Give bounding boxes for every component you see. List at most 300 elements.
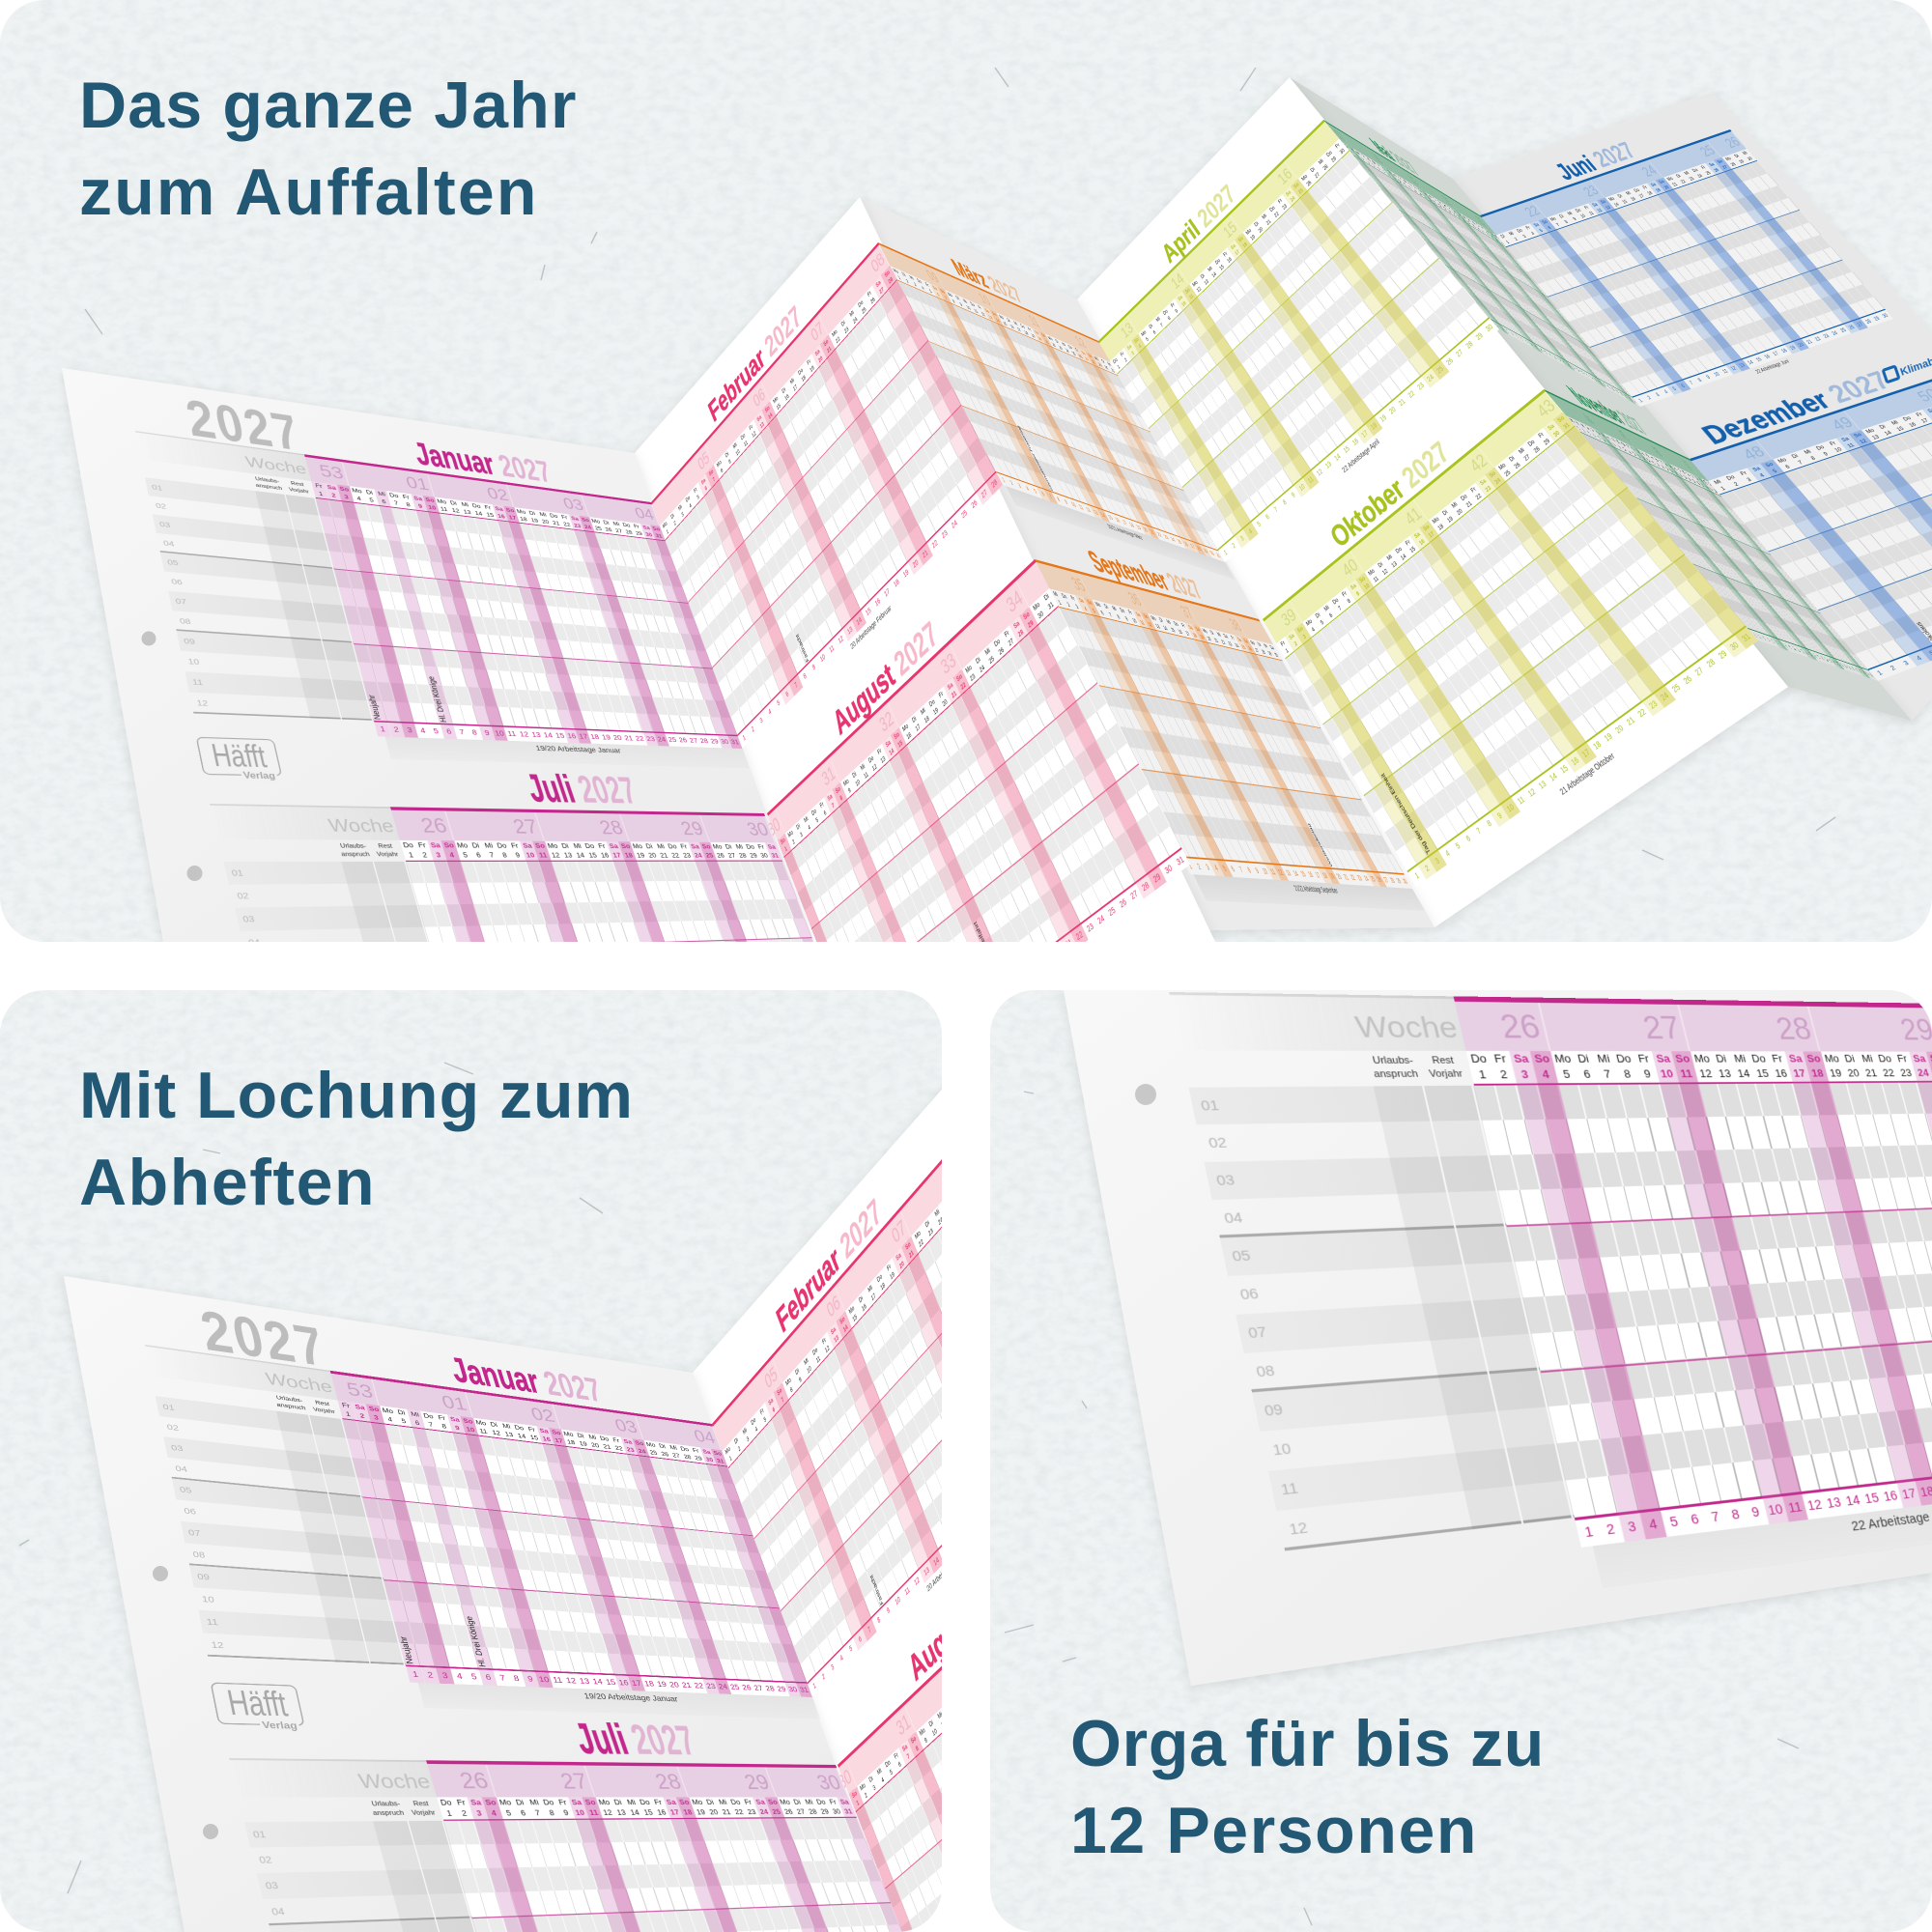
day numbers: 19 <box>656 1680 668 1689</box>
day numbers: 15 <box>1811 652 1819 659</box>
weekday header: Mi 19 <box>1436 199 1448 212</box>
day numbers: 24 <box>1831 329 1839 336</box>
weekday header: Di 16 <box>1644 452 1657 466</box>
day numbers: 8 <box>1528 341 1535 348</box>
weekday header: So 4 <box>484 1798 497 1817</box>
day numbers: 19 <box>601 733 611 742</box>
paper sheet: Juli close-up <box>1064 990 1932 1686</box>
weekday header: Di 19 <box>576 1432 588 1447</box>
week band: 29 <box>742 1772 773 1794</box>
day numbers: 16 <box>566 732 578 740</box>
weekday header: Di 16 <box>858 1293 867 1313</box>
weekday header: Do 8 <box>1615 1052 1633 1080</box>
day numbers: 1 <box>811 1681 817 1690</box>
weekday header: So 25 <box>700 842 714 859</box>
weekday header: Mi 13 <box>461 500 471 516</box>
holiday label: Hl. Drei Könige: Hl. Drei Könige <box>426 676 448 723</box>
weekday header: So 1 <box>851 1789 860 1807</box>
day numbers: 28 <box>1196 545 1203 553</box>
heading: September 2027: September 2027 <box>1082 544 1208 606</box>
weekday header: Fr 30 <box>1334 142 1346 156</box>
weekday header: Di 5 <box>397 1408 407 1425</box>
day numbers: 26 <box>1609 386 1616 392</box>
weekday header: So 24 <box>581 516 592 530</box>
week band: 30 <box>766 813 782 841</box>
day numbers: 11 <box>1543 349 1549 355</box>
day numbers: 12 <box>1729 365 1738 372</box>
weekday header: Mi 30 <box>1741 150 1753 161</box>
caption: Arbeitstage: 19/20 Arbeitstage Januar <box>535 744 622 754</box>
weekday header: Di 2 <box>1574 419 1587 434</box>
staff table: 02 <box>1208 1135 1229 1151</box>
weekday header: Sa 8 <box>1380 165 1392 178</box>
weekday header: So 2 <box>1349 146 1360 158</box>
day numbers: 14 <box>855 615 863 627</box>
weekday header: Di 31 <box>1042 591 1055 611</box>
day numbers: 20 <box>1797 341 1805 349</box>
week band <box>767 559 1049 840</box>
weekday header: Do 28 <box>679 1445 692 1461</box>
day numbers: 14 <box>1099 511 1107 519</box>
week band: 30 <box>836 1765 854 1795</box>
staff table: 09 <box>183 637 196 646</box>
weekday header: Mi 1 <box>1052 589 1063 606</box>
day numbers: 18 <box>1823 656 1831 664</box>
weekday header: Di 5 <box>365 489 374 503</box>
day numbers: 11 <box>903 1585 911 1598</box>
day numbers: 6 <box>1464 834 1472 844</box>
weekday header: Sa 24 <box>754 1798 769 1816</box>
grid body <box>316 498 737 735</box>
weekday header: So 3 <box>339 485 350 500</box>
day numbers: 25 <box>729 1683 741 1691</box>
day numbers: 10 <box>1790 645 1798 652</box>
weekday header: Fr 16 <box>597 842 610 859</box>
weekday header: Do 4 <box>750 1415 758 1434</box>
week band: 32 <box>877 707 896 737</box>
weekday header: Fr 16 <box>653 1798 668 1816</box>
day numbers: 13 <box>846 624 854 637</box>
weekday header: Sa 4 <box>1750 465 1766 478</box>
day numbers: 20 <box>1831 659 1838 666</box>
day numbers: 12 <box>1799 648 1806 655</box>
day numbers: 23 <box>1416 381 1426 392</box>
weekday header: Sa 14 <box>884 738 895 756</box>
weekday header: Do 9 <box>1119 607 1129 622</box>
weekday header: So 7 <box>708 468 716 483</box>
day numbers: 13 <box>530 730 542 739</box>
weekday header: Fr 5 <box>693 486 700 500</box>
weekday header: Do 7 <box>1331 596 1343 611</box>
caption: Arbeitstage: 21/22 Arbeitstage September <box>1293 884 1340 895</box>
day numbers: 7 <box>1237 865 1244 874</box>
weekday header: Do 15 <box>1214 257 1225 271</box>
day numbers: 16 <box>1350 437 1360 447</box>
weekday header: Mo 2 <box>787 828 796 846</box>
weekday header: Mi 16 <box>1625 190 1636 202</box>
weekday header: Do 17 <box>1633 187 1645 199</box>
logo: Klimabeitrag badge <box>1881 348 1932 384</box>
day numbers: 15 <box>1561 359 1568 366</box>
week band <box>390 807 776 842</box>
weekday header: Sa 25 <box>1236 636 1247 650</box>
weekend stripes <box>660 266 1003 749</box>
weekday header: So 3 <box>368 1405 380 1421</box>
weekday header: Mi 10 <box>962 298 972 311</box>
day numbers: 11 <box>1077 503 1085 511</box>
weekday header: Do 19 <box>928 697 939 717</box>
weekday header: Mo 23 <box>964 663 977 683</box>
heading: Mit Lochung zum Abheften: Abheften <box>79 1146 376 1219</box>
weekday header: So 29 <box>1022 610 1035 630</box>
weekday header: So 21 <box>1666 463 1680 476</box>
weekday header: Mo 20 <box>1201 627 1212 642</box>
weekday header: Di 20 <box>1253 220 1264 234</box>
day numbers: 23 <box>1842 663 1850 669</box>
weekday header: So 8 <box>835 784 843 802</box>
weekday header: Fr 5 <box>1589 427 1603 441</box>
day numbers: 22 <box>1635 707 1648 720</box>
staff table: 04 <box>1223 1209 1244 1227</box>
heading: Februar 2027: Februar 2027 <box>705 298 806 428</box>
weekday header: Do 20 <box>1441 202 1453 214</box>
weekday header: Do 2 <box>1724 473 1740 487</box>
weekday header: Fr 20 <box>938 690 949 708</box>
day numbers: 25 <box>1369 874 1378 884</box>
weekday header: Fr 9 <box>510 841 521 859</box>
calendar: Mai <box>1323 120 1639 406</box>
day numbers: 6 <box>1230 865 1236 874</box>
holiday label: Internationaler Frauentag <box>1015 425 1054 492</box>
weekday header <box>1496 149 1757 247</box>
day numbers: 8 <box>1696 377 1703 384</box>
weekday header: Fr 1 <box>341 1401 352 1418</box>
heading: Das ganze Jahr zum Auffalten: Das ganze Jahr <box>79 69 578 142</box>
weekday header: Sa 17 <box>609 842 622 859</box>
weekday header: Mi 20 <box>587 1434 600 1449</box>
week band: 48 <box>1739 443 1769 464</box>
day numbers: 6 <box>484 1672 493 1682</box>
weekend stripes <box>722 1158 1088 1697</box>
weekday header: Sa 3 <box>430 841 441 859</box>
week band: 11 <box>1026 312 1042 331</box>
calendar: Januar with staff table <box>135 388 745 781</box>
day numbers: 20 <box>1583 372 1590 379</box>
day numbers: 23 <box>941 528 949 540</box>
week band: 28 <box>1773 1012 1815 1046</box>
weekday header: Mo 9 <box>918 1725 928 1745</box>
grid body <box>784 607 1181 1081</box>
caption: Arbeitstage <box>1193 874 1425 911</box>
day numbers: 9 <box>1254 866 1261 875</box>
heading: Mit Lochung zum Abheften: Mit Lochung zum <box>79 1059 634 1132</box>
weekday header: Sa 3 <box>469 1798 483 1817</box>
week band: 38 <box>1227 615 1244 636</box>
staff table: 11 <box>191 677 204 687</box>
week band: 20 <box>1438 192 1457 211</box>
weekday header: Di 14 <box>1158 616 1169 632</box>
weekday header <box>1276 412 1576 659</box>
weekday header: So 25 <box>767 1798 781 1816</box>
weekday header: Sa 9 <box>1350 582 1360 597</box>
week band: 08 <box>868 249 887 276</box>
day numbers: 3 <box>758 716 764 725</box>
day numbers: 15 <box>865 606 872 617</box>
weekday header: Fr 25 <box>1700 164 1712 176</box>
day numbers: 10 <box>494 729 505 738</box>
weekday header: Di 8 <box>1558 213 1569 224</box>
day numbers <box>1217 317 1499 562</box>
weekday header <box>722 1158 987 1468</box>
day numbers: 8 <box>802 671 808 681</box>
caption: Arbeitstage: 22 Arbeitstage April <box>1341 438 1381 474</box>
weekday header: Fr 12 <box>749 423 756 439</box>
day numbers: 9 <box>1290 491 1296 499</box>
weekday header <box>1342 141 1507 247</box>
week band: 03 <box>561 496 585 514</box>
day numbers: 29 <box>1474 331 1485 342</box>
staff table: Urlaubs- <box>275 1395 303 1404</box>
day numbers: 23 <box>705 1682 717 1690</box>
staff table: 03 <box>158 520 171 529</box>
week band: 37 <box>1178 603 1197 623</box>
weekday header: So 31 <box>712 1449 724 1464</box>
week band <box>1454 996 1932 1052</box>
day numbers: 29 <box>1395 876 1403 885</box>
weekday header: Fr 15 <box>484 503 495 518</box>
day numbers: 11 <box>1795 646 1803 654</box>
heading: Orga für bis zu 12 Personen: 12 Personen <box>1070 1794 1478 1867</box>
staff table: Vorjahr <box>376 851 399 858</box>
calendar: Dezember <box>1690 366 1932 681</box>
weekday header: Mi 10 <box>803 1356 812 1375</box>
staff table: 04 <box>162 539 175 549</box>
heading: August 2027: August 2027 <box>829 613 943 742</box>
weekday header: Sa 9 <box>412 495 423 509</box>
calendar: März <box>878 242 1233 577</box>
day numbers: 6 <box>858 1634 863 1644</box>
caption: Arbeitstage: 20/21 Arbeitstage März <box>1106 523 1144 542</box>
weekday header: Do 25 <box>1067 344 1077 356</box>
staff table: 08 <box>1255 1362 1276 1380</box>
holiday label: Tag der Deutschen Einheit <box>1379 772 1432 856</box>
staff table: 05 <box>1231 1247 1252 1264</box>
calendar: Oktober <box>1263 389 1758 881</box>
logo: Häfft Verlag: Verlag <box>242 771 276 781</box>
day numbers: 3 <box>1205 863 1211 872</box>
day numbers: 17 <box>578 732 589 741</box>
day numbers: 16 <box>1815 653 1823 661</box>
day numbers: 27 <box>1454 348 1464 358</box>
weekday header: Mo 29 <box>1094 355 1103 368</box>
weekday header: Di 6 <box>515 1798 526 1817</box>
weekday header: Sa 4 <box>1077 596 1088 612</box>
weekday header: Sa 13 <box>983 307 994 321</box>
weekday header: Mi 31 <box>1106 360 1116 374</box>
weekday header: Fr 10 <box>1127 609 1138 624</box>
day numbers <box>1868 526 1932 681</box>
weekday header: So 4 <box>1133 336 1142 350</box>
day numbers: 19 <box>1378 412 1388 424</box>
weekday header: Di 25 <box>1465 216 1477 229</box>
day numbers: 14 <box>1746 359 1755 366</box>
weekend stripes <box>400 840 881 1157</box>
weekday header: Mi 28 <box>804 1798 818 1815</box>
week band <box>1323 120 1496 235</box>
day numbers: 11 <box>1306 474 1315 485</box>
day numbers: 11 <box>1787 1499 1804 1516</box>
weekday header: Sa 27 <box>1080 350 1090 362</box>
week band: 03 <box>612 1416 639 1437</box>
weekday header: Di 7 <box>1103 603 1113 618</box>
weekday header: Sa 20 <box>814 348 823 364</box>
weekday header: Mi 6 <box>1322 604 1334 619</box>
weekday header: Di 12 <box>1377 560 1389 577</box>
weekday header: Mi 1 <box>1713 478 1726 492</box>
weekday header: Mi 29 <box>1263 642 1273 657</box>
day numbers: 28 <box>1863 318 1873 325</box>
day numbers: 8 <box>1056 496 1062 503</box>
weekday header: Fr 28 <box>1480 225 1491 237</box>
staff table: 11 <box>206 1617 219 1628</box>
day numbers: 10 <box>819 652 826 664</box>
day numbers: 19 <box>1135 524 1143 531</box>
day numbers: 30 <box>1484 323 1494 333</box>
day numbers: 22 <box>1813 335 1822 342</box>
weekday header: So 30 <box>1489 231 1500 242</box>
day numbers: 24 <box>1846 664 1854 671</box>
weekday header: Fr 17 <box>1915 411 1930 424</box>
weekday header: Sa 23 <box>622 1437 636 1453</box>
weekday header: So 8 <box>910 1734 920 1752</box>
weekday header: So 18 <box>620 842 634 859</box>
calendar: Juli close-up with staff table <box>1169 992 1932 1583</box>
day numbers: 16 <box>617 1678 630 1688</box>
weekday header: Fr 19 <box>1658 459 1671 472</box>
weekday header: Sa 27 <box>875 278 885 296</box>
weekday header: Fr 9 <box>1170 301 1179 314</box>
weekday header: Fr 26 <box>1690 473 1702 487</box>
weekday header: Do 2 <box>1060 592 1071 609</box>
weekday header: Do 22 <box>1877 1052 1895 1079</box>
day numbers: 28 <box>1388 876 1397 885</box>
weekday header: Mo 14 <box>1607 196 1620 208</box>
day numbers: 30 <box>1881 312 1889 319</box>
day numbers: 12 <box>565 1676 578 1686</box>
day numbers: 4 <box>1212 863 1220 873</box>
weekday header: Mo 13 <box>1864 427 1881 440</box>
week band: 35 <box>1068 574 1089 596</box>
weekday header <box>311 481 666 541</box>
week band: 02 <box>485 485 511 504</box>
staff table: Urlaubs- <box>1372 1055 1414 1066</box>
staff table: 06 <box>171 578 184 586</box>
week band: 17 <box>1330 127 1350 145</box>
day numbers: 23 <box>1085 921 1095 934</box>
week band: 27 <box>510 816 541 838</box>
staff table: 07 <box>1247 1324 1268 1342</box>
weekday header: Sa 27 <box>1693 475 1706 489</box>
weekday header: Mo 15 <box>772 394 781 412</box>
day numbers: 12 <box>1805 1496 1824 1514</box>
day numbers: 24 <box>1362 874 1371 883</box>
weekday header: Mi 14 <box>573 842 585 859</box>
day numbers: 9 <box>886 1605 891 1616</box>
weekday header: Sa 6 <box>931 284 941 298</box>
day numbers: 13 <box>1551 354 1559 361</box>
day numbers: 10 <box>1712 371 1721 378</box>
day numbers: 7 <box>458 727 466 736</box>
weekday header: Fr 29 <box>633 523 643 536</box>
weekday header: Sa 6 <box>700 476 708 492</box>
weekday header: So 21 <box>904 1239 915 1260</box>
weekend stripes <box>338 1401 812 1697</box>
weekday header: Di 13 <box>1715 1052 1732 1080</box>
weekday header: Mo 25 <box>1497 462 1512 478</box>
week band: 23 <box>1580 183 1602 200</box>
weekday header: So 1 <box>780 836 788 853</box>
weekday header: Mi 20 <box>539 511 550 526</box>
weekday header <box>437 1797 857 1821</box>
week band: 05 <box>762 1363 780 1393</box>
weekday header: Sa 23 <box>570 515 582 529</box>
week band: 41 <box>1402 503 1425 529</box>
day numbers: 12 <box>913 1575 921 1588</box>
day numbers: 29 <box>1864 670 1871 677</box>
day numbers: 29 <box>776 1685 787 1693</box>
weekday header: Di 2 <box>900 270 910 284</box>
staff table: anspruch <box>276 1402 306 1411</box>
day numbers: 2 <box>426 1670 435 1680</box>
day numbers: 20 <box>1387 405 1397 416</box>
logo: Häfft Verlag <box>210 1682 305 1726</box>
week band: 33 <box>938 649 959 679</box>
week band <box>1263 389 1563 643</box>
week band: 07 <box>890 1216 908 1248</box>
day numbers: 13 <box>1537 779 1548 791</box>
day numbers: 22 <box>1592 377 1600 384</box>
heading: Dezember 2027: Dezember 2027 <box>1695 366 1897 449</box>
staff table: anspruch <box>340 851 371 858</box>
weekday header: Mo 12 <box>547 841 561 859</box>
day numbers: 1 <box>742 733 747 743</box>
weekday header: Mo 18 <box>1431 515 1445 531</box>
day numbers: 22 <box>1155 530 1163 539</box>
day numbers: 9 <box>1533 344 1540 351</box>
day numbers: 24 <box>656 735 667 744</box>
day numbers: 3 <box>1901 659 1911 667</box>
weekday header: Mo 8 <box>784 1376 793 1394</box>
calendar: August <box>838 1492 1292 1932</box>
weekday header: Mi 13 <box>1385 553 1398 569</box>
week band <box>651 242 890 526</box>
day numbers: 3 <box>1504 327 1511 334</box>
weekday header: Fr 16 <box>1771 1052 1788 1079</box>
weekend stripes <box>1496 149 1893 407</box>
week band: 47 <box>1679 457 1698 475</box>
day numbers: 19 <box>1603 731 1614 744</box>
weekday header: Fr 1 <box>314 482 324 497</box>
day numbers: 5 <box>1221 864 1228 873</box>
weekday header: Sa 5 <box>1532 221 1544 233</box>
day numbers: 17 <box>1314 870 1322 880</box>
holiday label: Neujahr: Neujahr <box>398 1636 415 1664</box>
weekday header: Fr 11 <box>1583 205 1595 216</box>
day numbers: 13 <box>1825 1494 1843 1512</box>
weekday header: Do 5 <box>810 807 819 824</box>
heading: Orga für bis zu 12 Personen: Orga für bis zu <box>1070 1707 1545 1780</box>
day numbers: 13 <box>1803 649 1810 657</box>
